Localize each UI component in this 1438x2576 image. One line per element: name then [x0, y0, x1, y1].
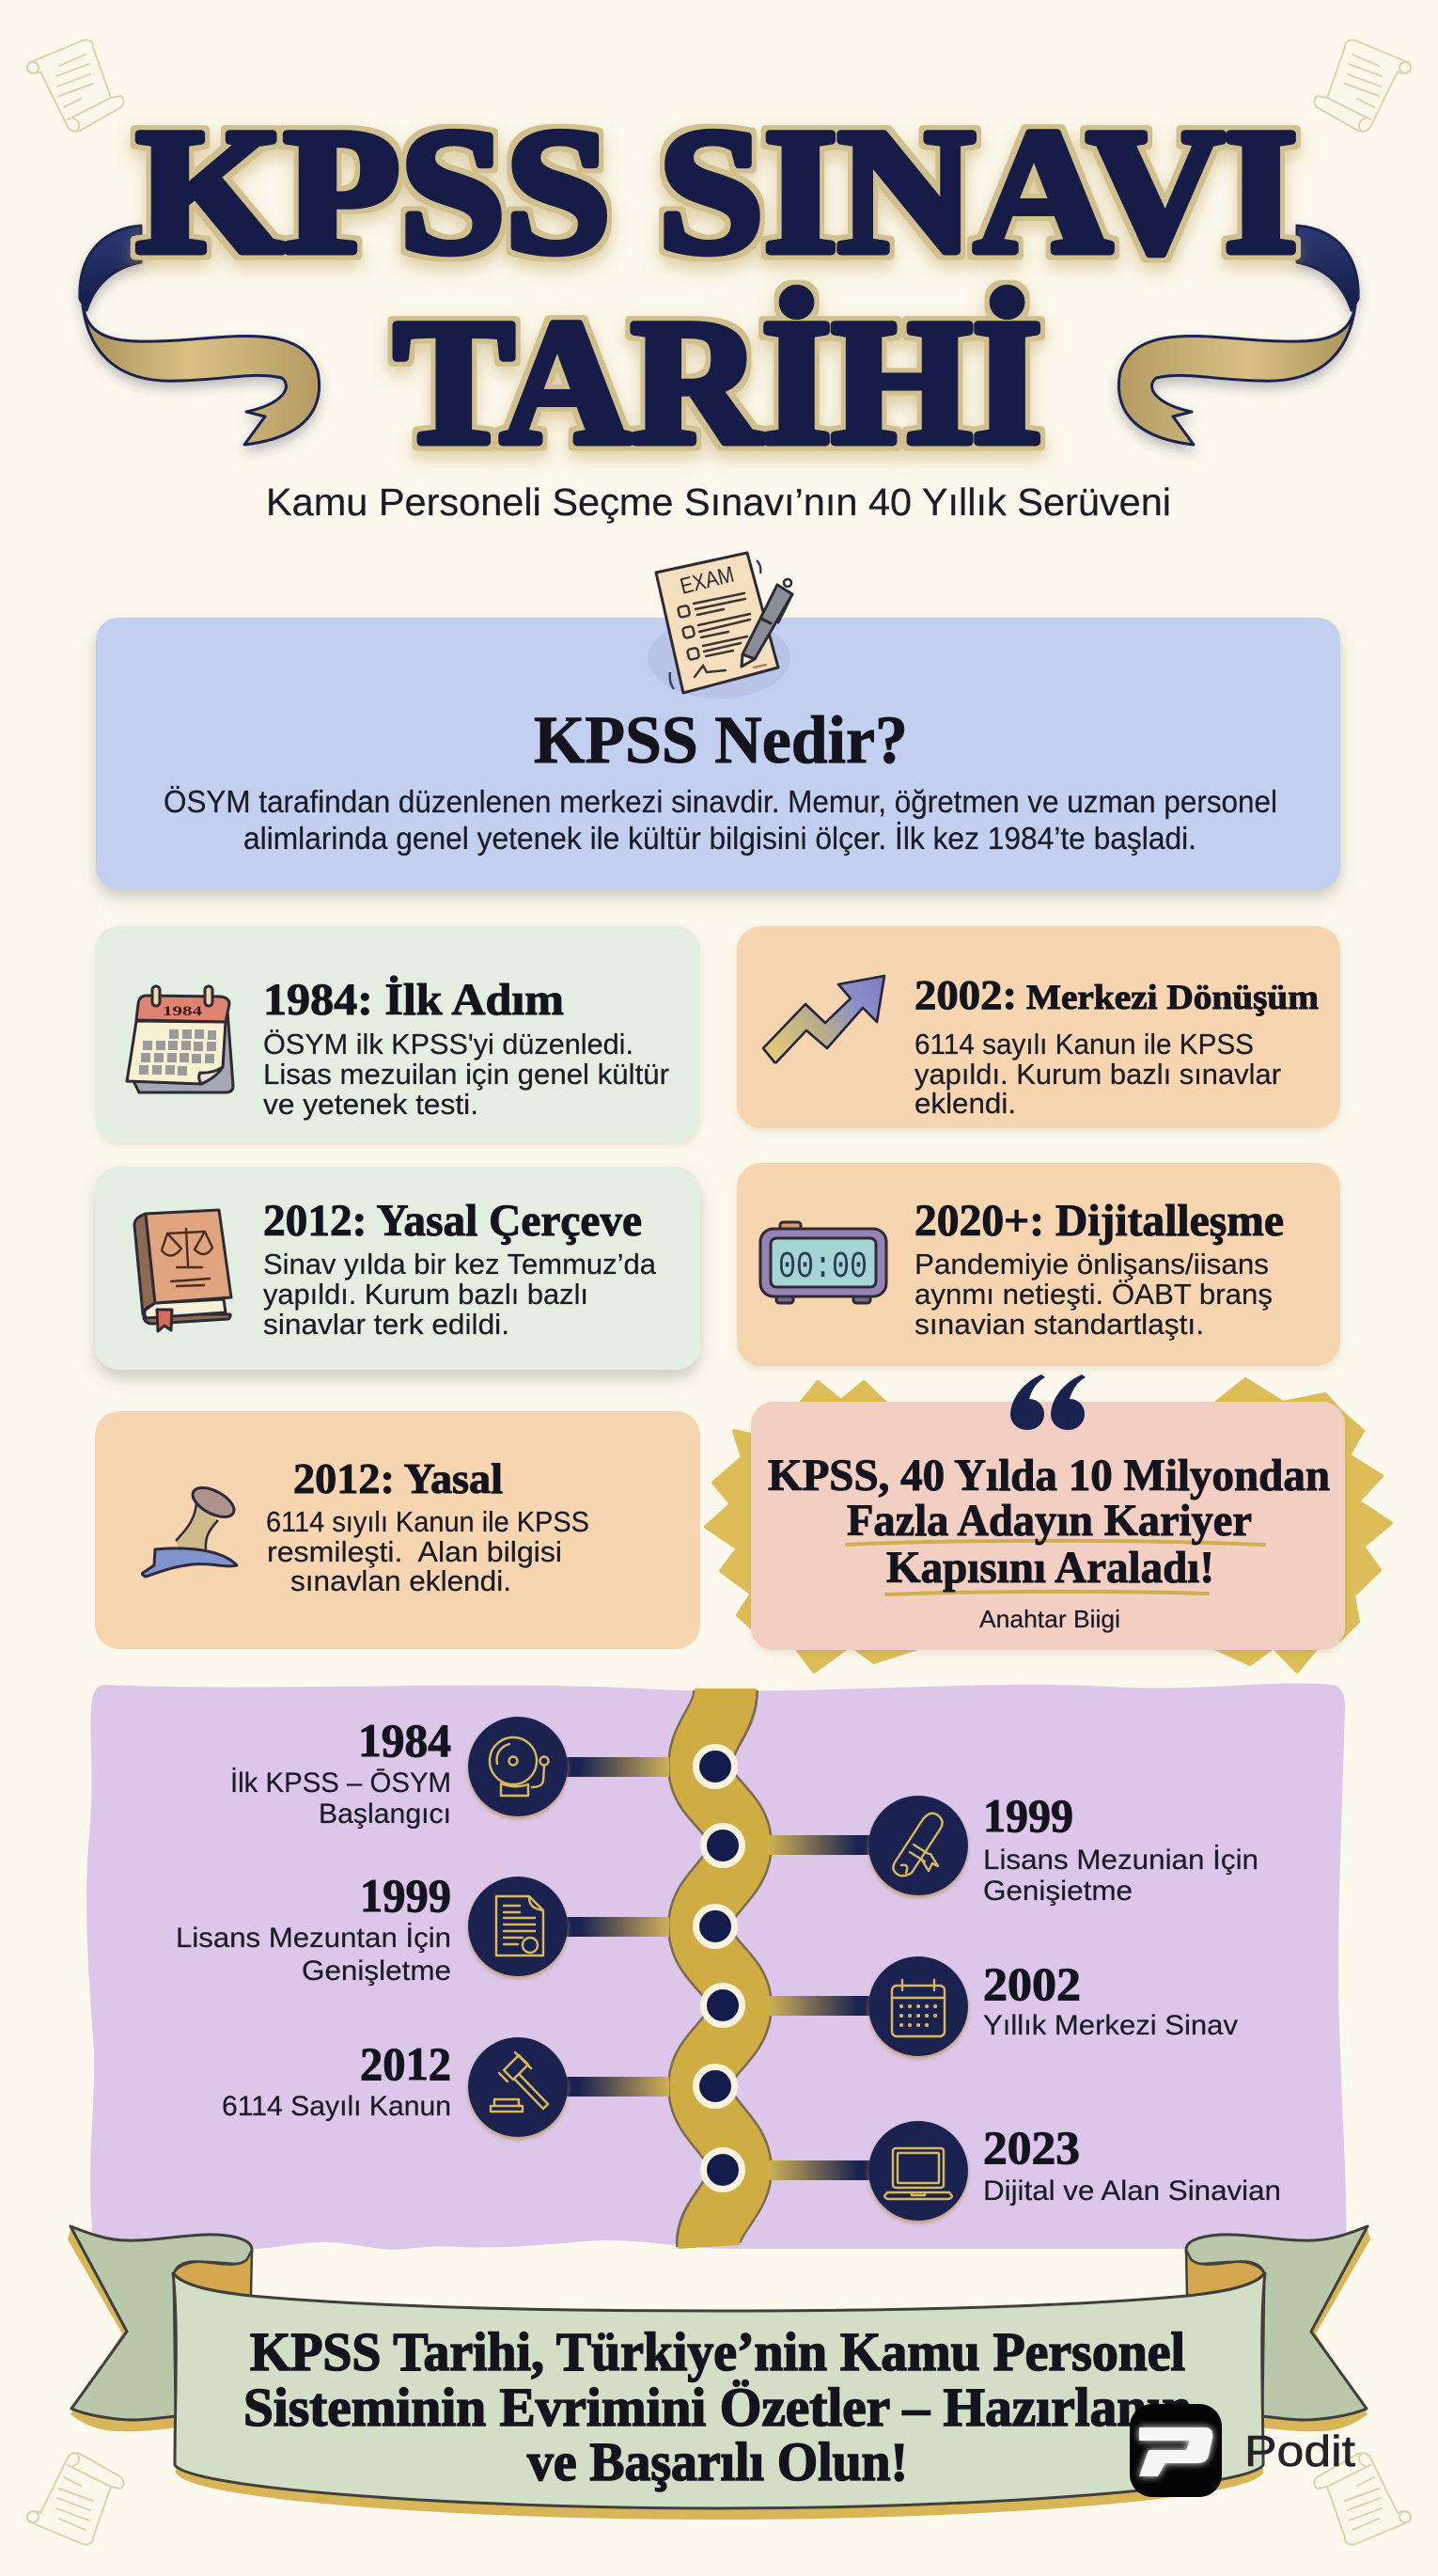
- quote text: KPSS, 40 Yılda 10 Milyondan: [768, 1451, 1330, 1500]
- card body: [914, 1248, 1273, 1341]
- description: [164, 784, 1277, 856]
- label: 2012 left: [222, 2037, 451, 2122]
- banner text: KPSS Tarihi, Türkiye’nin Kamu Personel: [250, 2321, 1185, 2382]
- label: 1984 left: İlk KPSS – ŌSYM: [230, 1767, 451, 1798]
- card body: 6114 sayılı Kanun ile KPSS: [914, 1028, 1254, 1060]
- card body: [266, 1505, 589, 1597]
- banner text: ve Başarılı Olun!: [527, 2431, 908, 2492]
- card body: resmileşti. Alan bilgisi: [267, 1535, 562, 1568]
- card heading: 1984: İlk Adım: [263, 975, 564, 1025]
- title: KPSS SINAVI: [136, 93, 1298, 291]
- icon: calendar outline: [868, 1956, 968, 2056]
- label: 1999 right: 1999: [983, 1789, 1073, 1842]
- winding spine: [700, 1690, 740, 2245]
- card heading: 2020+: Dijitalleşme: [914, 1196, 1284, 1246]
- connector right 1999: [769, 1835, 874, 1855]
- connector left 1984: [564, 1757, 669, 1777]
- pink card: [751, 1402, 1345, 1650]
- banner gold underlay: [176, 2444, 1263, 2520]
- label: 2012 left: 2012: [360, 2037, 451, 2090]
- icon: scroll top right: [1314, 40, 1411, 132]
- icon: gavel: [468, 2037, 568, 2137]
- icon: scroll bottom left: [27, 2453, 124, 2544]
- icon: law book: [134, 1210, 231, 1331]
- description: ÖSYM tarafindan düzenlenen merkezi sinavdir. Memur, öğretmen ve uzman personel: [164, 784, 1277, 819]
- icon: diploma: [868, 1796, 968, 1895]
- card body: ÖSYM ilk KPSS'yi düzenledi.: [263, 1028, 633, 1060]
- card body: sınavian standartlaştı.: [914, 1308, 1204, 1341]
- icon: exam paper: [648, 553, 792, 699]
- card: 1984: [95, 926, 700, 1142]
- label: 2002 right: 2002: [983, 1957, 1081, 2010]
- label: 2023 right: [983, 2121, 1281, 2207]
- banner right tail: [1186, 2226, 1370, 2431]
- banner left tail: [68, 2226, 252, 2431]
- label: 1999 left: 1999: [360, 1869, 451, 1922]
- panel: timeline: [86, 1683, 1346, 2250]
- card body: Pandemiyie önlişans/iisans: [914, 1248, 1269, 1280]
- card heading: 2012: Yasal: [293, 1454, 503, 1502]
- icon: scroll bottom right: [1314, 2453, 1411, 2544]
- logo: Podit: Podit: [1244, 2427, 1355, 2475]
- label: 1999 left: Lisans Mezuntan İçin: [176, 1923, 451, 1954]
- icon: laptop: [868, 2121, 968, 2221]
- card: 2012 Yasal: [95, 1411, 700, 1649]
- heading: KPSS Nedir?: [534, 702, 908, 778]
- label: 1984 left: 1984: [358, 1714, 451, 1767]
- card body: 6114 sıyılı Kanun ile KPSS: [266, 1505, 589, 1538]
- label: 2002 right: [983, 1957, 1238, 2041]
- card body: yapıldı. Kurum bazlı bazlı: [263, 1278, 588, 1311]
- icon: bell: [468, 1717, 568, 1816]
- quote text: Kapısını Araladı!: [886, 1543, 1214, 1593]
- card body: [914, 1028, 1281, 1120]
- card heading: 2002: Merkezi Dönüşüm: [914, 972, 1319, 1018]
- starburst: [706, 1379, 1391, 1672]
- node dots: [696, 1747, 742, 2189]
- subtitle: Kamu Personeli Seçme Sınavı’nın 40 Yıllık Serüveni: [266, 480, 1171, 524]
- icon: stamp: [142, 1482, 239, 1577]
- title: TARİHİ: [394, 284, 1042, 481]
- label: 2023 right: Dijital ve Alan Sinavian: [983, 2175, 1281, 2207]
- connector left 2012: [564, 2077, 669, 2097]
- icon: scroll top left: [27, 40, 124, 132]
- quote mark: [1010, 1374, 1086, 1430]
- card body: aynmı netieşti. ÖABT branş: [914, 1278, 1273, 1311]
- icon: calendar: [127, 986, 233, 1092]
- card body: ve yetenek testi.: [263, 1088, 478, 1121]
- label: 2002 right: Yıllık Merkezi Sinav: [983, 2010, 1238, 2041]
- banner text: Sisteminin Evrimini Özetler – Hazırlanın: [243, 2377, 1192, 2438]
- label: 1999 right: [983, 1789, 1258, 1907]
- connector left 1999: [564, 1917, 669, 1937]
- icon: digital clock: 00:00: [778, 1247, 867, 1289]
- label: 1984 left: [230, 1714, 451, 1830]
- banner: [68, 2226, 1370, 2520]
- quote text: Fazla Adayın Kariyer: [847, 1496, 1252, 1546]
- card heading: 2012: Yasal Çerçeve: [263, 1196, 642, 1246]
- card body: Sinav yılda bir kez Temmuz’da: [263, 1248, 657, 1280]
- label: 1984 left: Başlangıcı: [319, 1798, 451, 1830]
- icon: rising arrow: [763, 976, 884, 1063]
- banner text: [243, 2321, 1192, 2492]
- caption: Anahtar Biigi: [979, 1605, 1120, 1633]
- underline accents: [847, 1541, 1264, 1594]
- connector right 2023: [769, 2160, 874, 2180]
- card body: sınavlan eklendi.: [290, 1564, 511, 1597]
- description: alimlarinda genel yetenek ile kültür bilgisini ölçer. İlk kez 1984’te başladi.: [243, 821, 1196, 856]
- card body: eklendi.: [914, 1087, 1016, 1120]
- callout: key info: [706, 1374, 1391, 1672]
- card body: sinavlar terk edildi.: [263, 1308, 509, 1341]
- ribbon left: [80, 226, 320, 445]
- icon: digital clock: [760, 1222, 886, 1303]
- card: 2002: [737, 926, 1340, 1128]
- card body: yapıldı. Kurum bazlı sınavlar: [914, 1058, 1281, 1091]
- logo: Podit: [1130, 2404, 1355, 2497]
- label: 1999 left: [176, 1869, 451, 1987]
- label: 1999 left: Genişletme: [302, 1956, 451, 1987]
- card: 2020: [737, 1163, 1340, 1366]
- label: 2023 right: 2023: [983, 2121, 1080, 2174]
- icon: document: [468, 1877, 568, 1976]
- quote text: [768, 1451, 1330, 1593]
- card body: [263, 1248, 657, 1341]
- icon: exam paper: EXAM: [678, 562, 737, 600]
- label: 2012 left: 6114 Sayılı Kanun: [222, 2091, 451, 2122]
- title: [136, 93, 1298, 481]
- label: 1999 right: Genişietme: [983, 1876, 1133, 1907]
- ribbon right: [1118, 226, 1358, 445]
- label: 1999 right: Lisans Mezunian İçin: [983, 1845, 1258, 1876]
- card body: Lisas mezuilan için genel kültür: [263, 1058, 669, 1091]
- card: 2012 Yasal Çerçeve: [95, 1167, 700, 1370]
- icon: calendar: 1984: [163, 1004, 203, 1019]
- winding spine fill: [700, 1689, 740, 2247]
- banner face: [173, 2273, 1265, 2508]
- panel: KPSS Nedir: [96, 553, 1340, 889]
- card body: [263, 1028, 669, 1121]
- connector right 2002: [769, 1996, 874, 2016]
